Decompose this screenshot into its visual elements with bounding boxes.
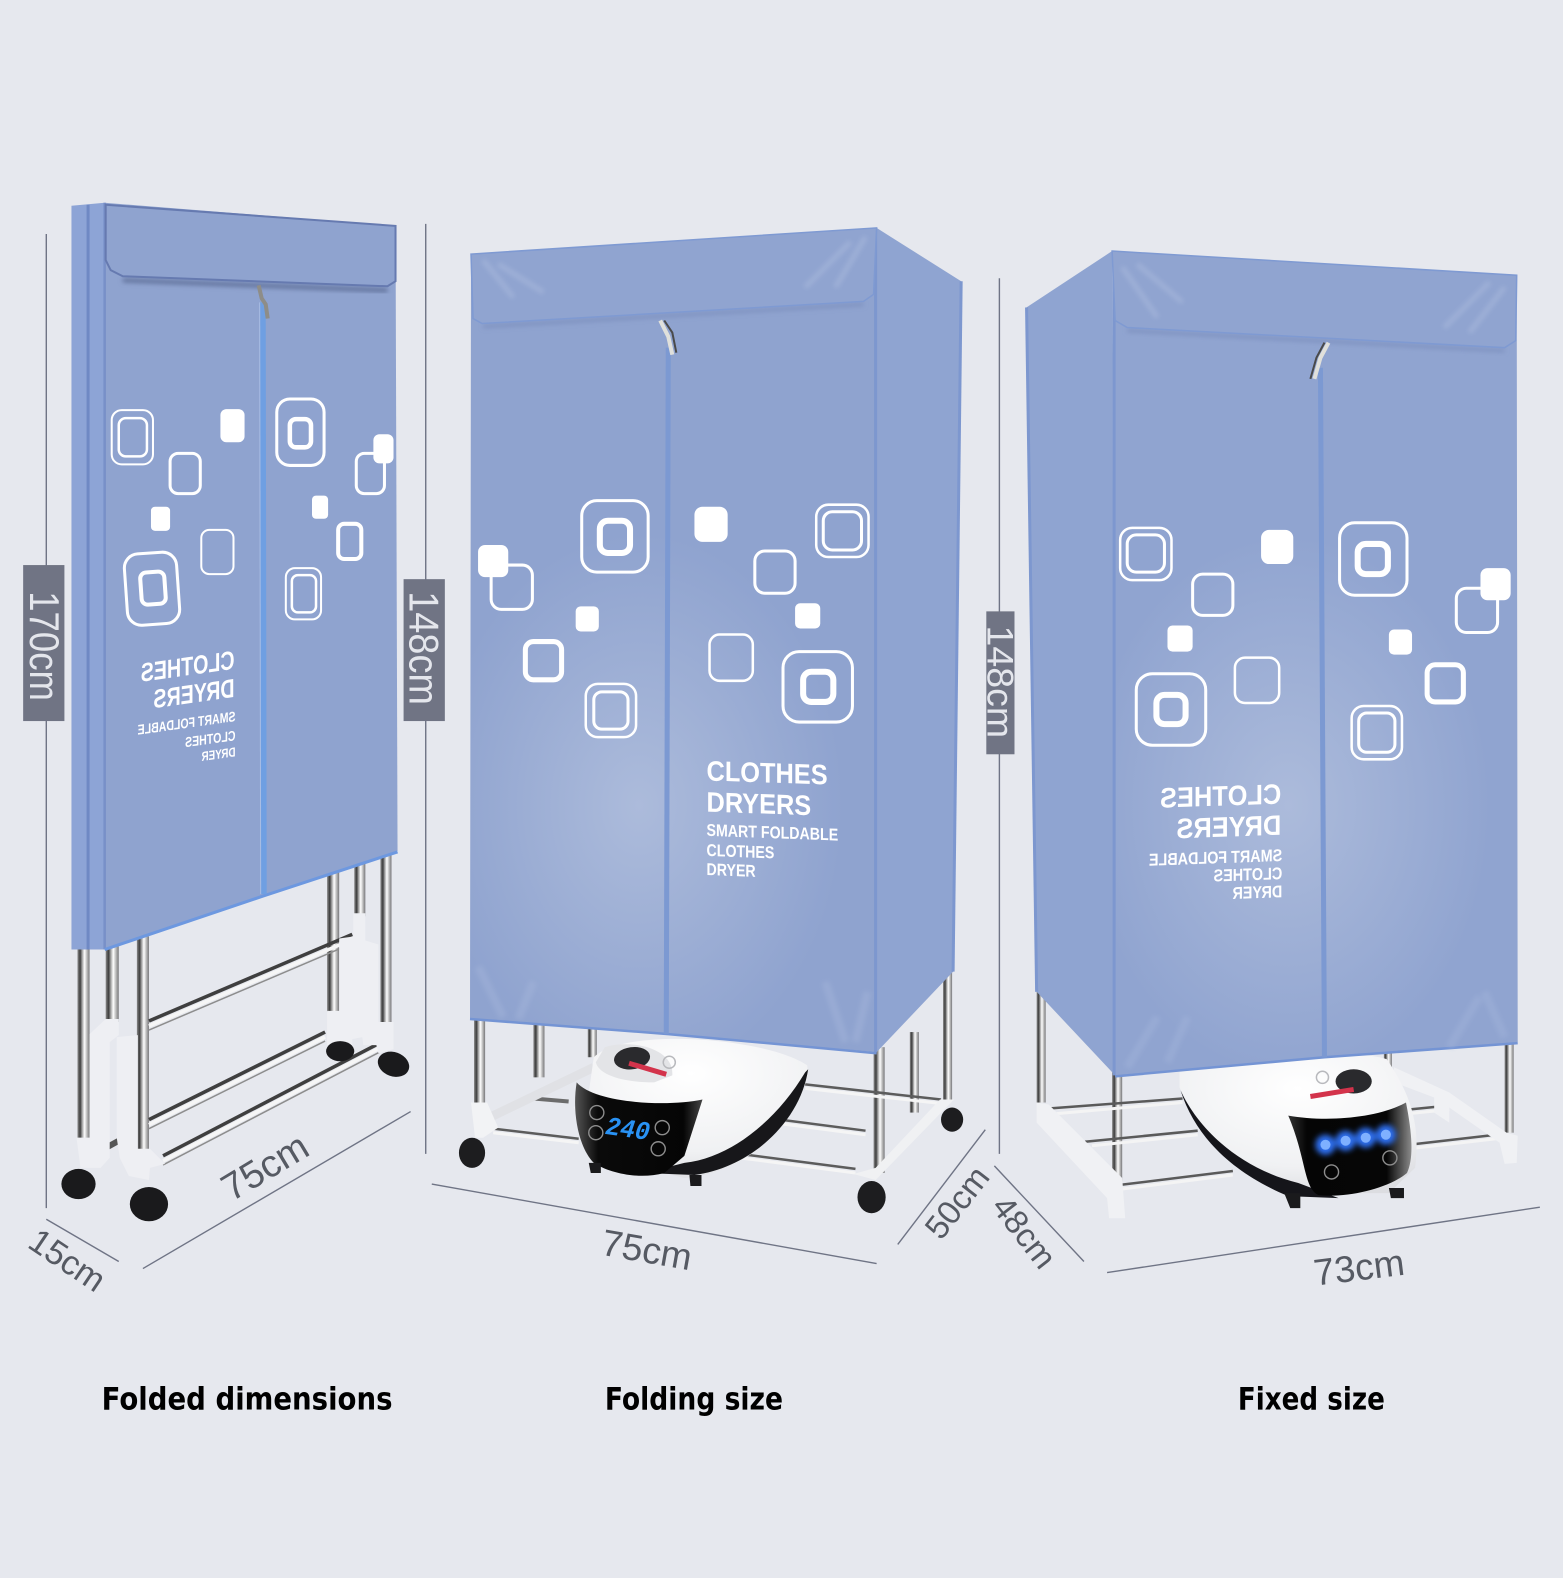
fixed mirrored print: DRYER xyxy=(1232,883,1282,903)
fixed heater base xyxy=(1180,1054,1417,1208)
dimension: folding width 75cm: 75cm xyxy=(598,1221,695,1278)
folding zipper pull xyxy=(660,321,672,355)
folded mirrored print: SMART FOLDABLE xyxy=(138,709,236,738)
dimension: fixed depth 48cm xyxy=(984,1166,1084,1276)
folding right side cover xyxy=(877,228,961,1052)
dimension: fixed width 73cm: 73cm xyxy=(1311,1241,1407,1294)
fixed base emblem xyxy=(1336,1069,1372,1093)
folding panel buttons xyxy=(589,1106,669,1156)
folding print: CLOTHES xyxy=(707,842,774,863)
folding print xyxy=(707,755,838,881)
folding print: SMART FOLDABLE xyxy=(707,822,838,845)
fixed mirrored print xyxy=(1149,778,1282,903)
folding digital display: 240 xyxy=(604,1112,652,1148)
dimension: folded width 75cm: 75cm xyxy=(214,1125,316,1210)
dimension: folded depth 15cm: 15cm xyxy=(22,1222,112,1300)
fixed pattern xyxy=(1120,523,1511,759)
folded mirrored print: CLOTHES xyxy=(141,645,235,687)
dimension: folding depth 50cm: 50cm xyxy=(918,1160,997,1246)
panel: fixed size dryer xyxy=(1027,251,1518,1218)
dimension: fixed width 73cm xyxy=(1107,1207,1540,1294)
folding top flap xyxy=(483,304,864,327)
dimension: folding height 148cm xyxy=(401,224,447,1154)
folded dryer top flap xyxy=(123,280,387,290)
folding legs and bars xyxy=(459,969,963,1213)
folding print: DRYER xyxy=(707,861,756,881)
folding print: DRYERS xyxy=(707,786,811,821)
fixed blue indicator lights xyxy=(1315,1125,1396,1155)
folded dryer side strip xyxy=(71,203,105,950)
dimension: folding depth 50cm xyxy=(898,1130,997,1246)
fixed zipper pull xyxy=(1314,343,1328,379)
dimension: folded height 170cm: 170cm xyxy=(21,591,67,701)
dimension: folding width 75cm xyxy=(432,1184,877,1278)
fixed panel buttons xyxy=(1324,1151,1397,1179)
fixed top flap xyxy=(1127,331,1505,351)
panel: folding size dryer xyxy=(459,228,963,1213)
panel: folded dryer xyxy=(61,203,413,1221)
folding wheels xyxy=(459,1108,963,1213)
caption: fixed size: Fixed size xyxy=(1238,1381,1385,1417)
folded mirrored print: DRYER xyxy=(201,745,236,765)
folded mirrored print xyxy=(138,645,236,765)
fixed left side cover xyxy=(1027,251,1115,1075)
dimension: fixed depth 48cm: 48cm xyxy=(984,1189,1063,1276)
folded pattern xyxy=(112,399,394,626)
fixed mirrored print: SMART FOLDABLE xyxy=(1149,847,1282,870)
folded dryer wheels xyxy=(61,1041,413,1221)
fixed legs and bars xyxy=(1037,992,1518,1218)
folding heater base xyxy=(574,1039,808,1186)
folded dryer zipper xyxy=(263,302,264,894)
fixed mirrored print: CLOTHES xyxy=(1214,865,1282,886)
folded dryer plastic brackets xyxy=(76,913,394,1180)
folding bottom creases xyxy=(478,967,868,1042)
folded mirrored print: CLOTHES xyxy=(185,728,236,751)
folding pattern xyxy=(478,501,869,737)
dimension: folded width 75cm xyxy=(143,1112,411,1269)
dimension: fixed height 148cm: 148cm xyxy=(979,625,1021,738)
folding front cover xyxy=(470,228,877,1052)
dimension: fixed height 148cm xyxy=(979,278,1021,1154)
dimension: folded height 170cm xyxy=(21,234,67,1208)
folding base emblem xyxy=(613,1045,652,1072)
fixed mirrored print: CLOTHES xyxy=(1160,778,1281,814)
fixed zipper xyxy=(1320,368,1324,1057)
fixed mirrored print: DRYERS xyxy=(1177,810,1281,845)
folded dryer front cover xyxy=(105,203,398,950)
folded dryer legs xyxy=(61,851,413,1221)
fixed front cover xyxy=(1112,251,1518,1075)
folded zipper pull xyxy=(259,285,268,318)
caption: folding size: Folding size xyxy=(605,1381,783,1417)
folding zipper xyxy=(666,348,668,1034)
fixed bottom creases xyxy=(1127,992,1505,1067)
folded mirrored print: DRYERS xyxy=(153,673,235,714)
caption: folded dimensions: Folded dimensions xyxy=(102,1381,393,1417)
folding print: CLOTHES xyxy=(707,755,828,791)
dimension: folding height 148cm: 148cm xyxy=(401,591,447,705)
